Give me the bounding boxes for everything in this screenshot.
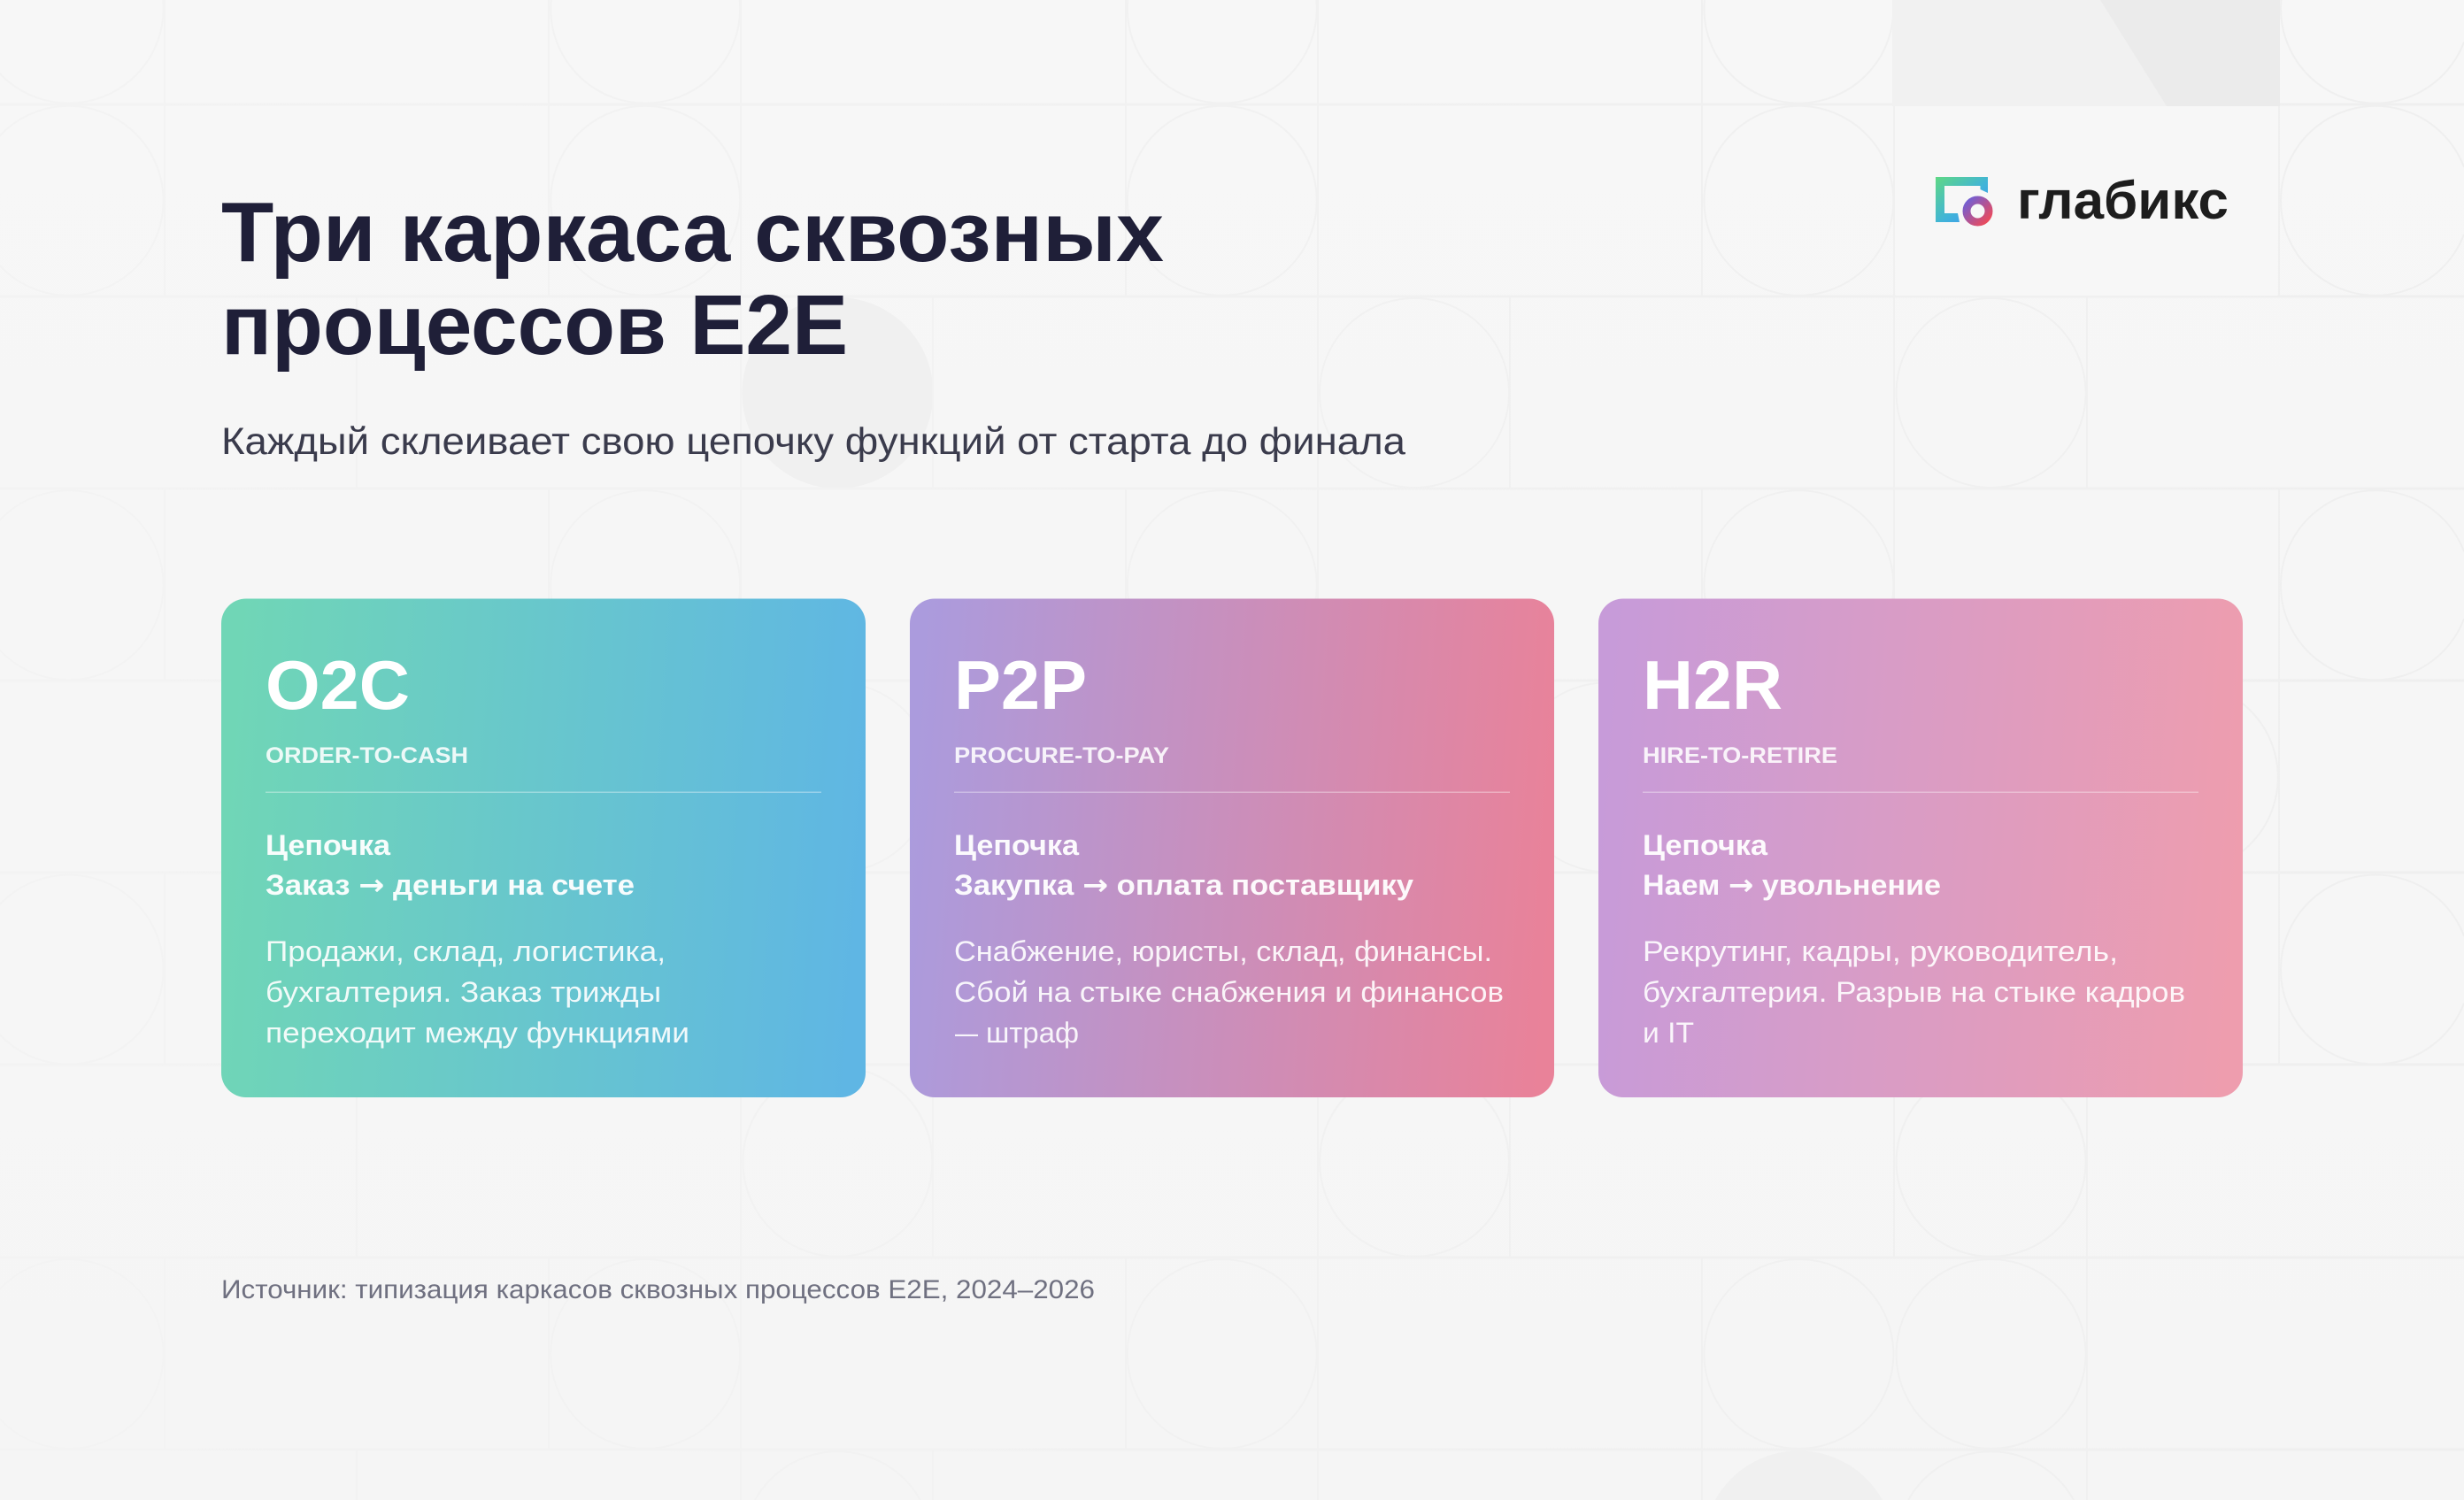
description: бухгалтерия. Заказ трижды	[266, 976, 661, 1008]
description	[954, 935, 1504, 1049]
chain text: Цепочка	[266, 829, 390, 861]
chain text: Цепочка	[1643, 829, 1767, 861]
card subheading: PROCURE-TO-PAY	[954, 743, 1169, 768]
source footnote: Источник: типизация каркасов сквозных процессов E2E, 2024–2026	[221, 1275, 1095, 1304]
panel: P2P	[910, 598, 1554, 1097]
card subheading: ORDER-TO-CASH	[266, 743, 468, 768]
description: Рекрутинг, кадры, руководитель,	[1643, 935, 2118, 967]
chain text: Цепочка	[954, 829, 1079, 861]
card heading H2R: H2R	[1643, 646, 1783, 724]
chain text: Заказ → деньги на счете	[266, 868, 635, 902]
description: Продажи, склад, логистика,	[266, 935, 666, 967]
card heading O2C: O2C	[266, 646, 410, 724]
description	[266, 935, 689, 1049]
panel: H2R	[1598, 598, 2243, 1097]
chain text: Наем → увольнение	[1643, 868, 1941, 902]
subtitle: Каждый склеивает свою цепочку функций от старта до финала	[221, 420, 1405, 463]
chain text	[266, 829, 635, 902]
description: —	[955, 1017, 978, 1049]
panel: O2C	[221, 598, 866, 1097]
description: бухгалтерия. Разрыв на стыке кадров	[1643, 976, 2185, 1008]
title: процессов E2E	[221, 278, 848, 373]
chain text: Закупка → оплата поставщику	[954, 868, 1413, 902]
chain text	[954, 829, 1413, 902]
description: и IT	[1643, 1017, 1694, 1049]
title: Три каркаса сквозных	[221, 185, 1164, 280]
card heading P2P: P2P	[954, 646, 1087, 724]
logo	[1936, 171, 2229, 230]
icon: logo mark	[1936, 177, 1989, 222]
description: Снабжение, юристы, склад, финансы.	[954, 935, 1492, 967]
title	[221, 185, 1164, 373]
description: переходит между функциями	[266, 1017, 689, 1049]
logo wordmark: глабикс	[2017, 171, 2229, 230]
chain text	[1643, 829, 1941, 902]
description: штраф	[986, 1017, 1079, 1049]
description: Сбой на стыке снабжения и финансов	[954, 976, 1504, 1008]
card subheading: HIRE-TO-RETIRE	[1643, 743, 1837, 768]
description	[1643, 935, 2185, 1049]
